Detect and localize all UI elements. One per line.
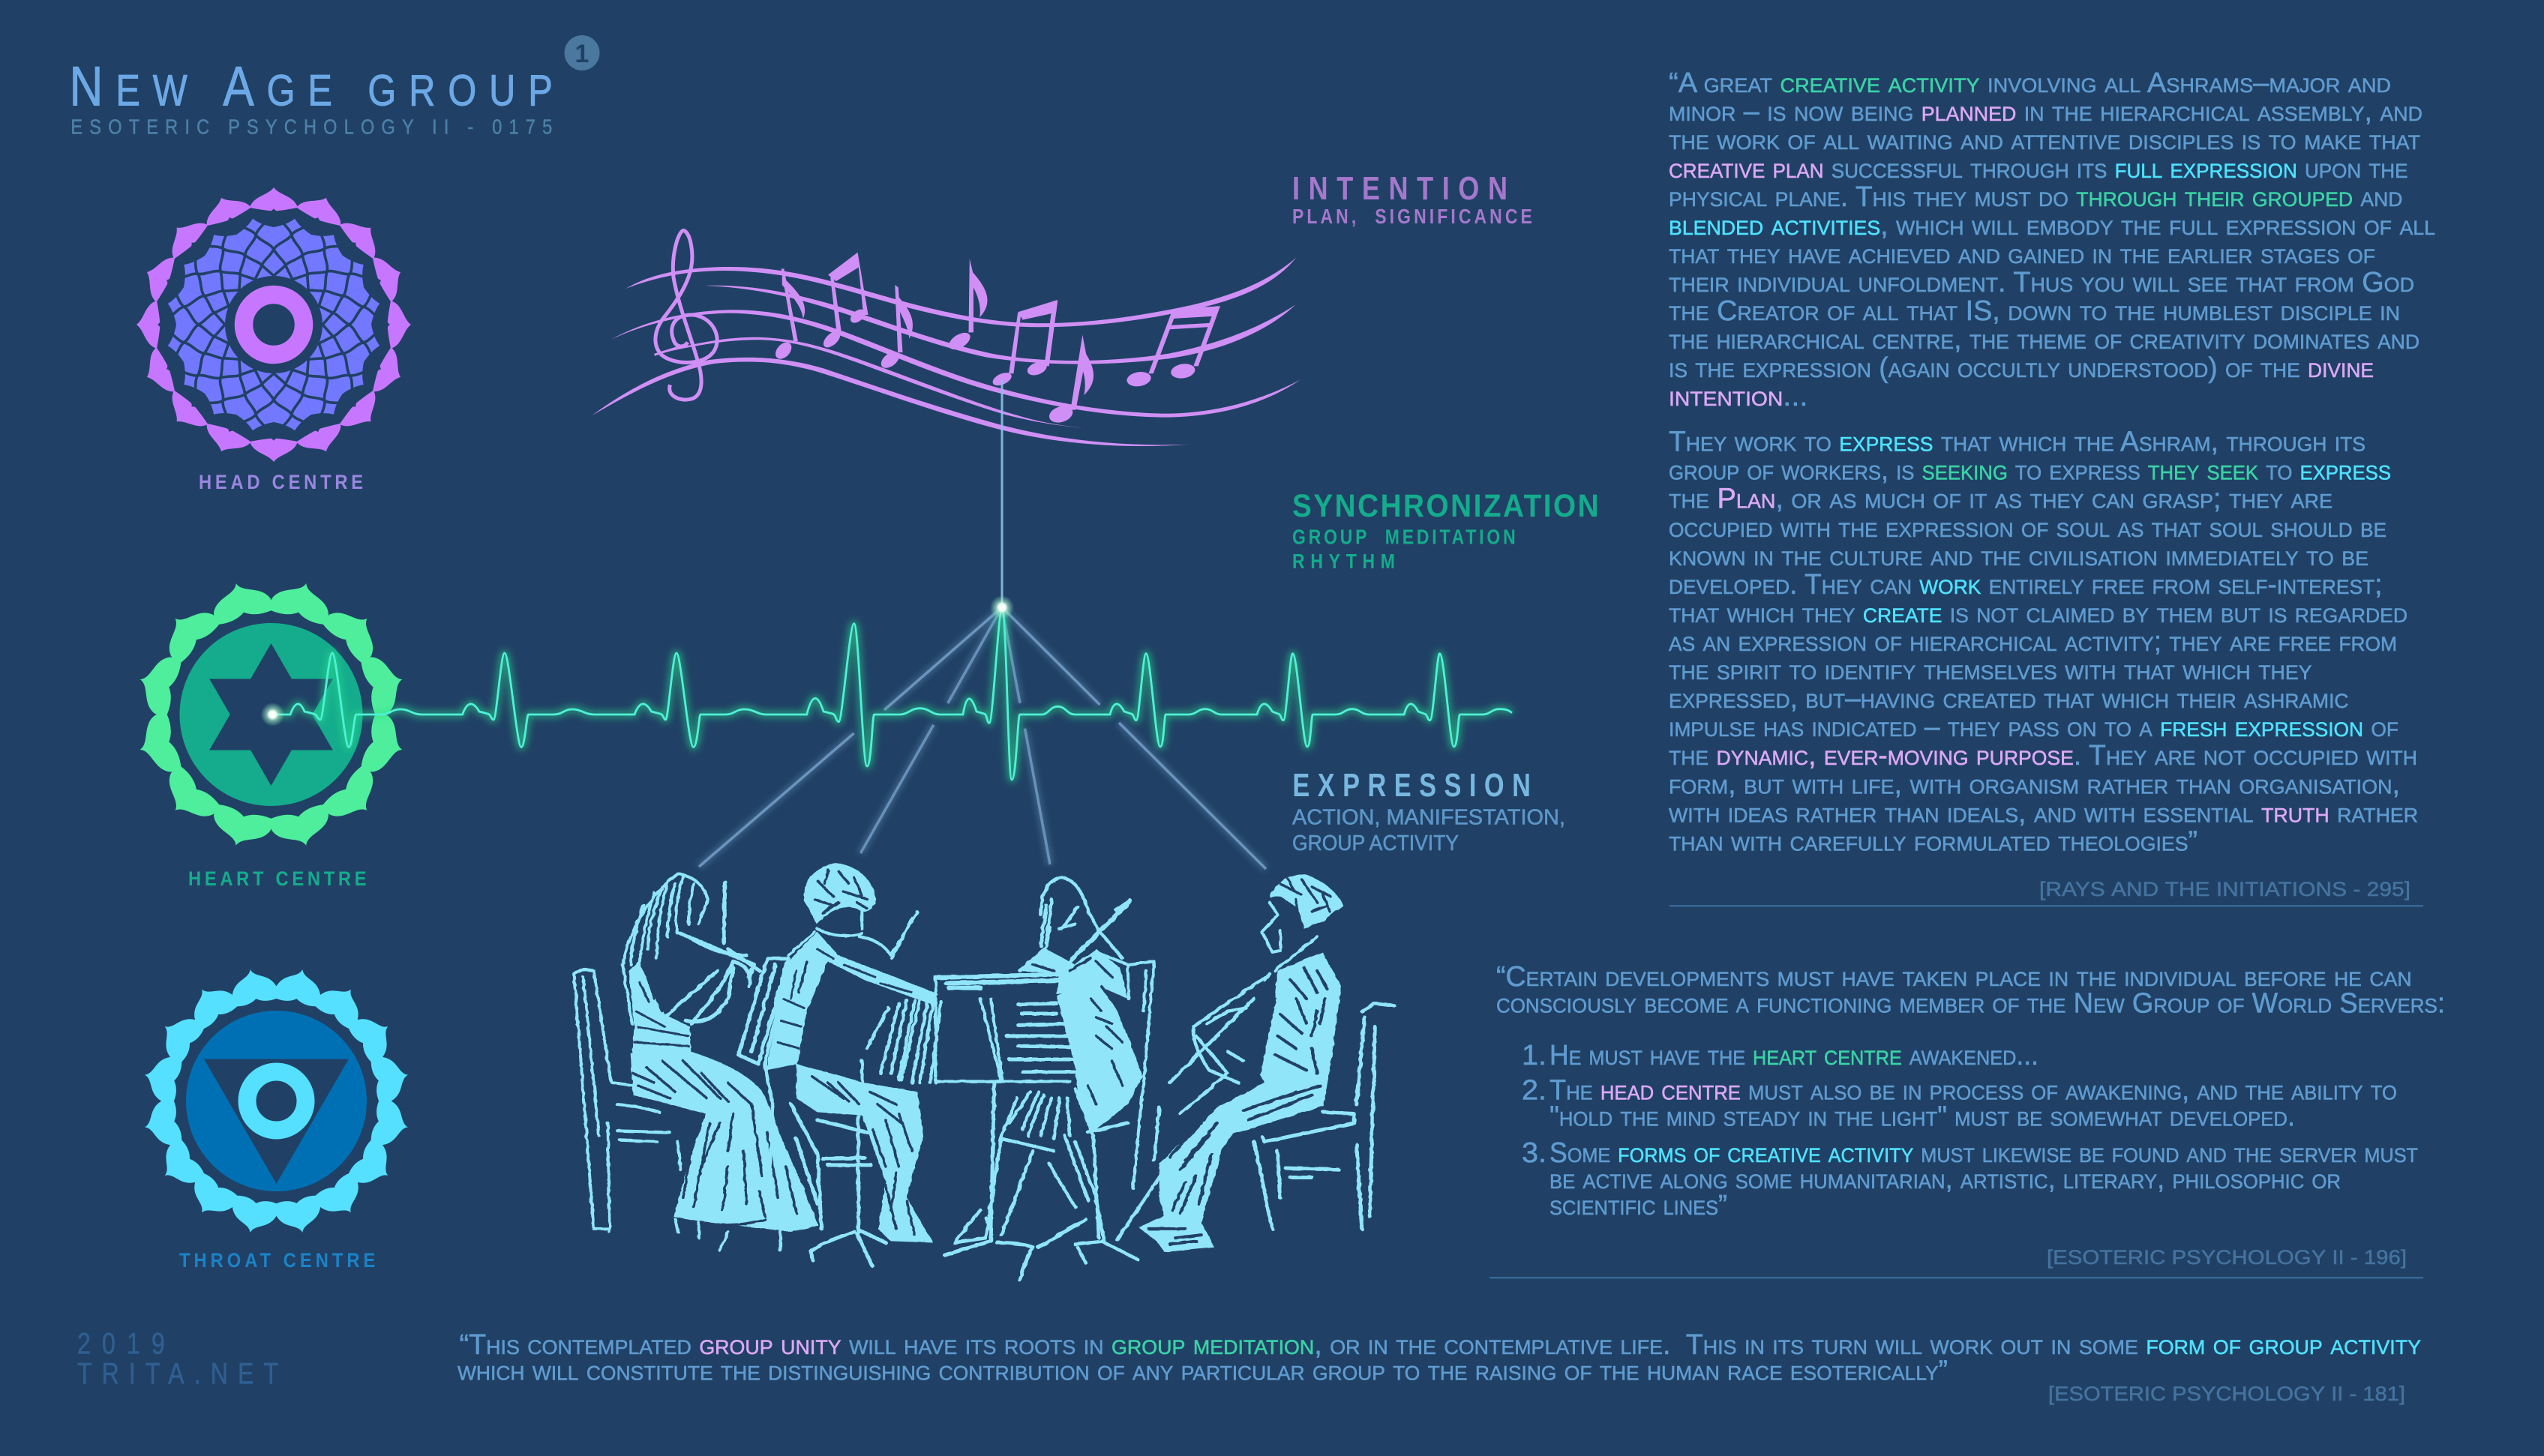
rule: [1670, 905, 2423, 906]
text block: rays quote paragraph 2: expressed, but–having created that which their ashramic: [1669, 683, 2349, 715]
text block: rays quote paragraph 1: creative plan successful through its full expression upon the: [1669, 153, 2408, 184]
text block: rays quote paragraph 2: known in the culture and the civilisation immediately to be: [1669, 541, 2368, 572]
text block: rays quote paragraph 2: that which they create is not claimed by them but is regarded: [1669, 598, 2408, 629]
rule: [1490, 1277, 2423, 1278]
text block: new group of world servers quote: “Certain developments must have taken place in the individual before he can: [1496, 961, 2412, 993]
heading: synchronization: SYNCHRONIZATION: [1292, 487, 1599, 523]
text block: rays quote paragraph 2: as an expression of hierarchical activity; they are free from: [1669, 626, 2397, 658]
text block: rays quote paragraph 2: [1669, 427, 2418, 858]
beam: to viola: [860, 607, 1002, 853]
badge: number 1: 1: [575, 40, 589, 68]
heading: expression: EXPRESSION: [1292, 767, 1531, 804]
text block: rays quote paragraph 1: minor – is now being planned in the hierarchical assembly, and: [1669, 96, 2422, 127]
text block: rays quote paragraph 2: group of workers, is seeking to express they seek to express: [1669, 455, 2391, 487]
figure: cellist: [1118, 873, 1394, 1252]
subheading: RHYTHM: [1292, 550, 1395, 574]
glowing dot: apex: [990, 595, 1014, 619]
text block: rays quote paragraph 2: occupied with the expression of soul as that soul should be: [1669, 512, 2386, 544]
subheading: GROUP MEDITATION: [1292, 526, 1516, 549]
list item 3: be active along some humanitarian, artistic, literary, philosophic or: [1550, 1164, 2341, 1195]
badge: number 1: [564, 35, 600, 70]
beam: vertical to music: [999, 380, 1005, 607]
text block: bottom quote: “This contemplated group unity will have its roots in group meditation, or in the contemplative life. This in its turn will work out in some form of group activity: [459, 1329, 2421, 1361]
subheading: ACTION, MANIFESTATION,: [1292, 805, 1565, 829]
list item 2: [1522, 1075, 2397, 1133]
text block: rays quote paragraph 1: is the expression (again occultly understood) of the divine: [1669, 352, 2374, 384]
text block: rays quote paragraph 1: the Creator of all that IS, down to the humblest disciple in: [1669, 295, 2400, 327]
icon: treble clef: [654, 230, 717, 400]
footer credit: 2019: [77, 1326, 165, 1361]
text block: rays quote paragraph 2: impulse has indicated – they pass on to a fresh expression of: [1669, 712, 2398, 743]
heading: intention: [1292, 170, 1532, 229]
music staff and notes: [592, 230, 1300, 446]
label: head centre: HEAD CENTRE: [199, 472, 363, 493]
label: throat centre: THROAT CENTRE: [179, 1250, 375, 1272]
illustration: string quartet: [574, 863, 1394, 1280]
subtitle: ESOTERIC PSYCHOLOGY II - 0175: [70, 116, 552, 139]
list item 2: 2.: [1522, 1075, 1546, 1107]
text block: rays quote paragraph 2: with ideas rather than ideals, and with essential truth rather: [1669, 798, 2418, 829]
list item 3: 3.: [1522, 1137, 1546, 1169]
text block: rays quote paragraph 1: the hierarchical centre, the theme of creativity dominates and: [1669, 324, 2420, 355]
list item 2: "hold the mind steady in the light" must be somewhat developed.: [1550, 1101, 2295, 1133]
heading: intention: INTENTION: [1292, 170, 1508, 207]
text block: rays quote paragraph 2: developed. They can work entirely free from self-interest;: [1669, 569, 2382, 601]
beam: to cello: [1002, 607, 1266, 869]
text block: rays quote paragraph 2: form, but with life, with organism rather than organisation,: [1669, 769, 2400, 801]
text block: rays quote paragraph 1: physical plane. This they must do through their grouped and: [1669, 181, 2403, 213]
footer credit: TRITA.NET: [77, 1356, 278, 1391]
subheading: PLAN, SIGNIFICANCE: [1292, 205, 1532, 229]
label: heart centre: HEART CENTRE: [188, 868, 367, 890]
text block: new group of world servers quote: [1496, 961, 2445, 1221]
citation: esoteric psychology 181: [Esoteric Psychology II - 181]: [2048, 1376, 2405, 1407]
heading: expression: [1292, 767, 1565, 855]
icon: throat centre chakra: [140, 965, 412, 1237]
glowing dot: heart: [261, 703, 285, 727]
figure: first violinist: [574, 873, 818, 1251]
figure: violist: [738, 863, 941, 1243]
text block: rays quote paragraph 1: the work of all waiting and attentive disciples is to make that: [1669, 124, 2420, 156]
subheading: GROUP ACTIVITY: [1292, 831, 1459, 855]
list item 1: 1.: [1522, 1040, 1546, 1071]
citation: rays and the initiations: [Rays and the Initiations - 295]: [2039, 871, 2410, 903]
text block: rays quote paragraph 2: the spirit to identify themselves with that which they: [1669, 655, 2312, 686]
icon: notes: [772, 253, 1220, 424]
text block: rays quote paragraph 1: blended activities, which will embody the full expression of all: [1669, 210, 2435, 241]
text block: bottom quote: which will constitute the distinguishing contribution of any particular group to the raising of the human race esoterically”: [458, 1356, 1948, 1387]
list item 3: Some forms of creative activity must likewise be found and the server must: [1550, 1137, 2418, 1169]
beam: to second violin: [1002, 607, 1050, 864]
icon: music stand: [811, 974, 1085, 1280]
text block: rays quote paragraph 2: They work to express that which the Ashram, through its: [1669, 427, 2366, 458]
icon: head centre chakra: [136, 187, 411, 462]
heading: synchronization: [1292, 487, 1599, 574]
list item 3: scientific lines”: [1550, 1190, 1727, 1221]
list item 1: He must have the heart centre awakened...: [1550, 1040, 2038, 1071]
text block: rays quote paragraph 2: the dynamic, ever-moving purpose. They are not occupied with: [1669, 740, 2417, 771]
text block: rays quote paragraph 1: that they have achieved and gained in the earlier stages of: [1669, 238, 2375, 270]
list item 2: The head centre must also be in process of awakening, and the ability to: [1550, 1075, 2397, 1107]
citation: esoteric psychology 196: [Esoteric Psychology II - 196]: [2047, 1239, 2407, 1271]
beams of light: [699, 380, 1266, 869]
text block: new group of world servers quote: consciously become a functioning member of the New Group of World Servers:: [1496, 988, 2445, 1020]
list item 3: [1522, 1137, 2418, 1221]
text block: rays quote paragraph 1: intention...: [1669, 381, 1808, 412]
beam: to first violin: [699, 607, 1002, 867]
text block: rays quote paragraph 2: the Plan, or as much of it as they can grasp; they are: [1669, 484, 2332, 515]
text block: rays quote paragraph 1: their individual unfoldment. Thus you will see that from God: [1669, 267, 2414, 298]
text block: bottom quote: [458, 1329, 2421, 1387]
text block: rays quote paragraph 1: [1669, 67, 2435, 412]
icon: heart centre chakra: [132, 576, 410, 853]
title: N EW A GE GROUP: [69, 56, 553, 118]
footer credit: [77, 1326, 278, 1391]
figure: second violinist: [954, 877, 1154, 1263]
ECG heartbeat line: [272, 610, 1512, 780]
text block: rays quote paragraph 1: “A great creative activity involving all Ashrams–major and: [1669, 67, 2391, 99]
text block: rays quote paragraph 2: than with carefully formulated theologies”: [1669, 826, 2198, 858]
